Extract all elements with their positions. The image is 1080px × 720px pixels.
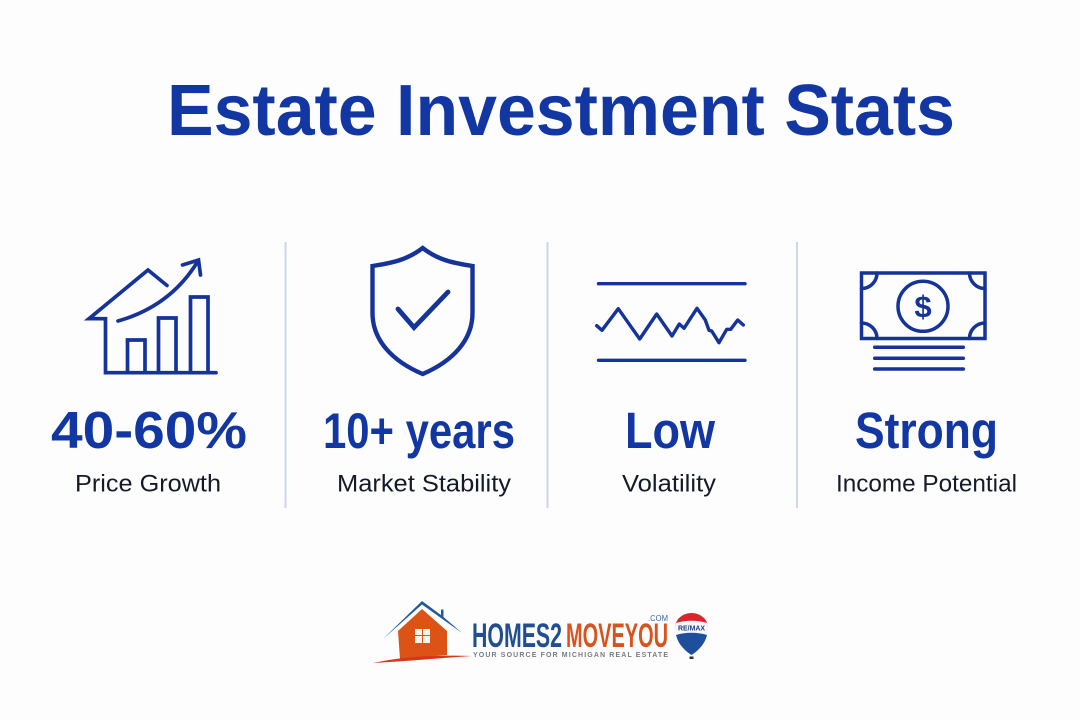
- dollar sign: $: [914, 289, 932, 324]
- icon: shield with check: [372, 248, 472, 374]
- stat: low: Low: [625, 402, 715, 459]
- wordmark: moveyou: MOVEYOU: [566, 617, 668, 655]
- panel: price growth: [51, 260, 247, 498]
- icon: banknote with dollar sign: [862, 273, 985, 369]
- label: market stability: Market Stability: [337, 470, 511, 498]
- panel: volatility: [597, 284, 745, 498]
- wordmark: homes2: HOMES2: [472, 617, 562, 655]
- icon: RE/MAX balloon: RE/MAX: [678, 624, 705, 632]
- panel: income potential: [836, 273, 1017, 498]
- wordmark: .com: .COM: [648, 614, 668, 623]
- title: Estate Investment Stats: [167, 71, 955, 151]
- icon: house with rising bars and arrow: [89, 260, 216, 373]
- label: income potential: Income Potential: [836, 470, 1017, 498]
- stat: strong: Strong: [855, 402, 998, 459]
- icon: low volatility line between bands: [597, 284, 745, 360]
- divider 2: [546, 242, 548, 508]
- logo: Homes2MoveYou with RE/MAX balloon: [373, 601, 708, 663]
- label: volatility: Volatility: [622, 470, 716, 498]
- label: price growth: Price Growth: [75, 470, 221, 498]
- panel: market stability: [323, 248, 515, 498]
- icon: RE/MAX balloon: [675, 613, 708, 659]
- stat: 10+ years: 10+ years: [323, 403, 515, 459]
- divider 3: [796, 242, 798, 508]
- icon: orange house: [373, 601, 472, 663]
- divider 1: [284, 242, 286, 508]
- tagline: YOUR SOURCE FOR MICHIGAN REAL ESTATE: [473, 652, 668, 659]
- stat: 40-60%: 40-60%: [51, 402, 247, 460]
